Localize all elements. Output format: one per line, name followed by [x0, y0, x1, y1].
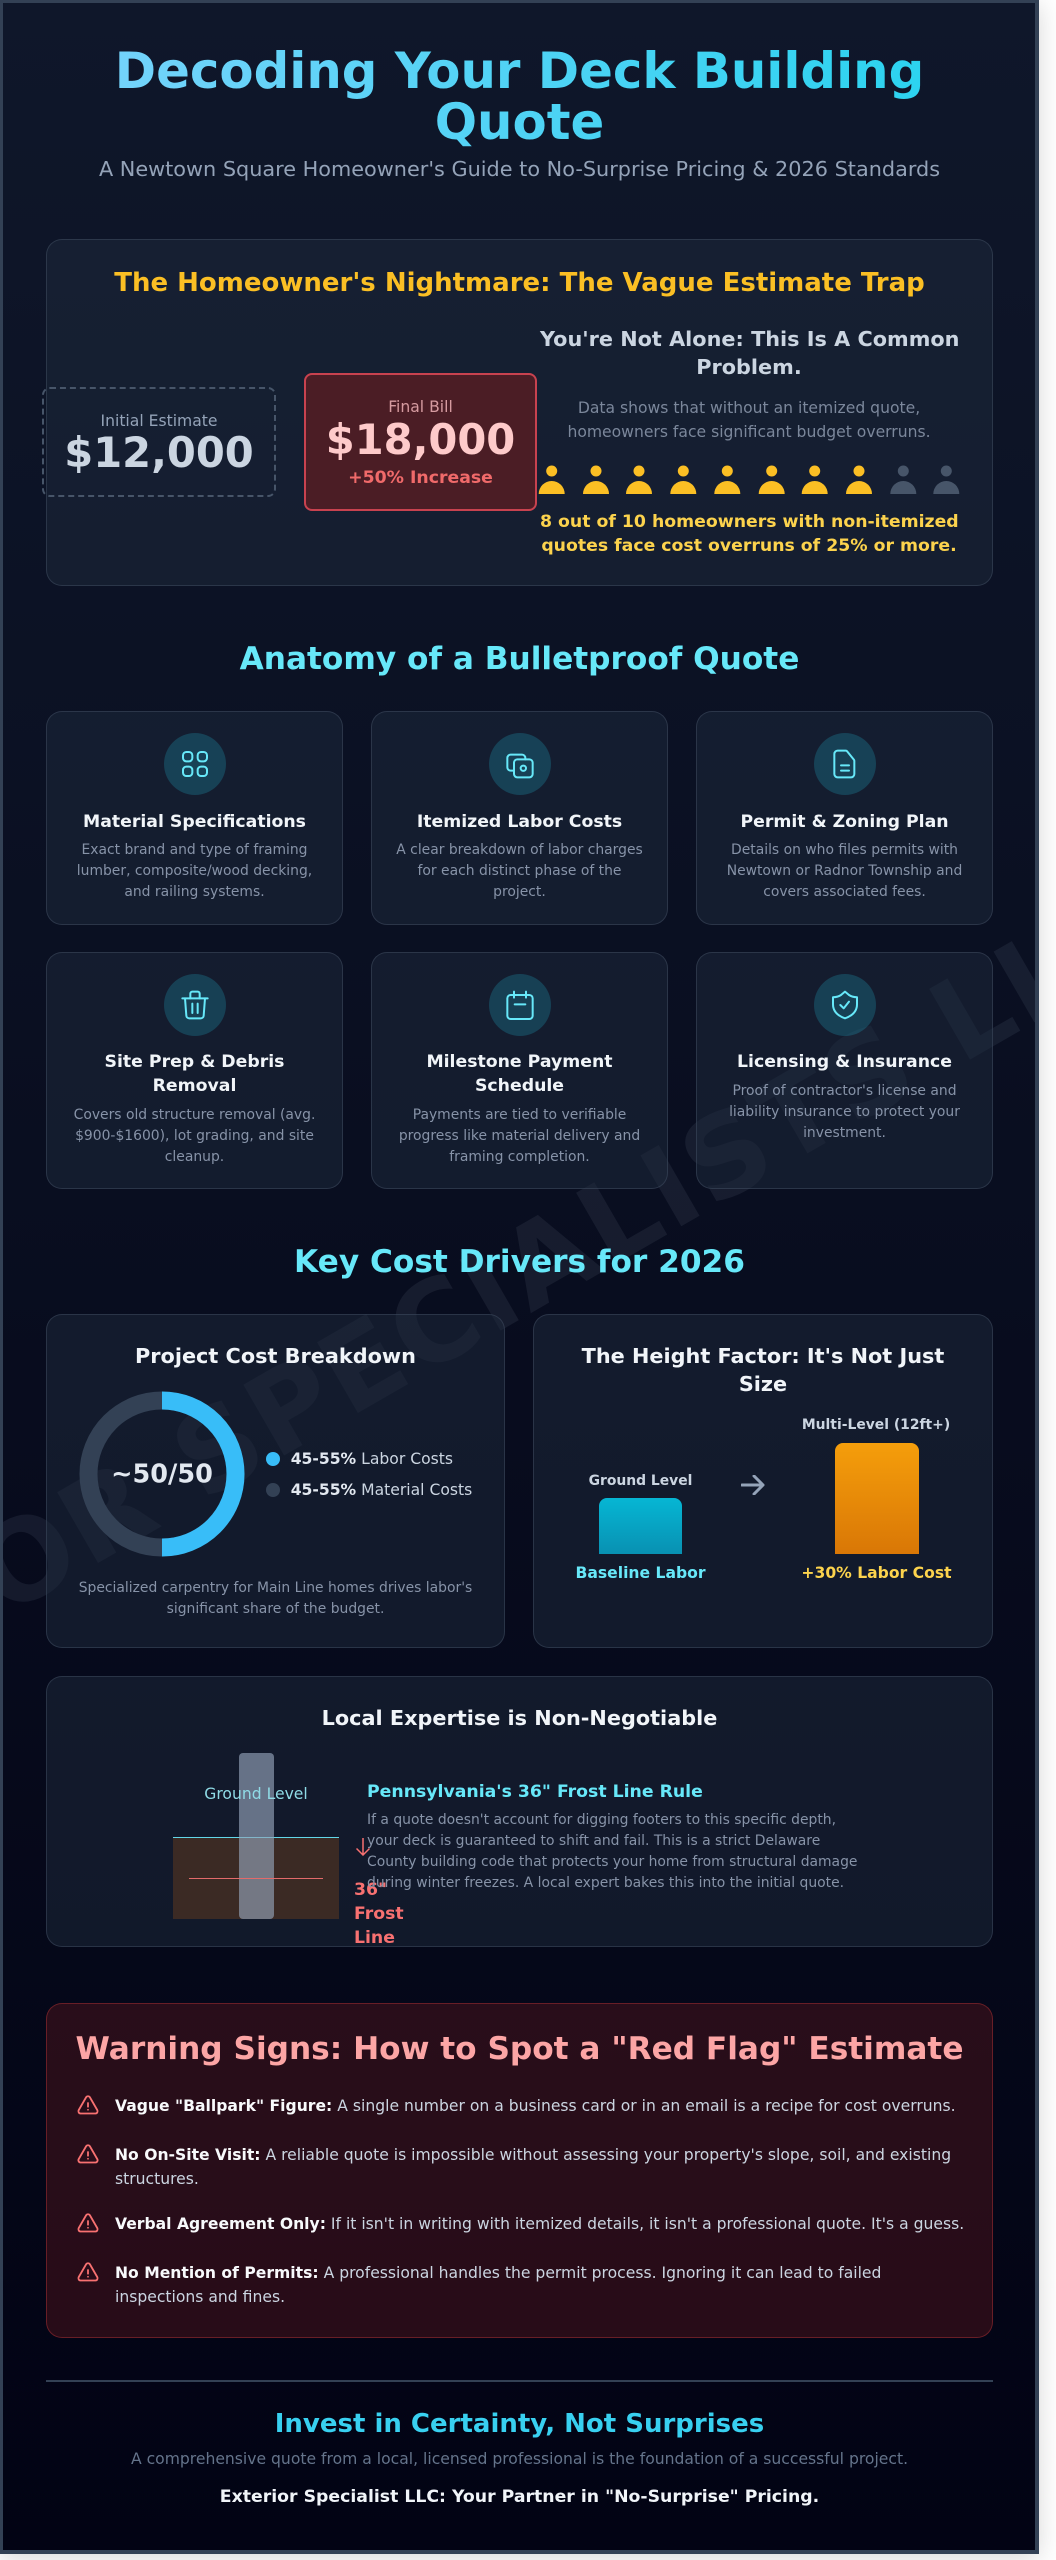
- frost line diagram: [173, 1753, 404, 1948]
- icon: warning 4: [78, 2262, 98, 2282]
- donut chart: ~50/50: [111, 1460, 213, 1490]
- card text: [729, 1082, 960, 1140]
- card title: Milestone Payment: [426, 1052, 613, 1072]
- card text: [727, 842, 962, 900]
- label: frost line: Line: [354, 1928, 395, 1948]
- icon: warning 2: [78, 2144, 98, 2164]
- panel: itemized labor costs: [371, 711, 668, 924]
- legend dot: labor: [266, 1452, 280, 1466]
- icon: squares: [164, 733, 226, 795]
- subtitle: A Newtown Square Homeowner's Guide to No-Surprise Pricing & 2026 Standards: [99, 157, 940, 181]
- post: [239, 1753, 274, 1919]
- card text: [77, 842, 312, 900]
- callout: initial estimate: [42, 387, 276, 497]
- warning item 3: Verbal Agreement Only: If it isn't in writing with itemized details, it isn't a professional quote. It's a guess.: [115, 2215, 964, 2233]
- label: baseline labor: Baseline Labor: [575, 1564, 706, 1582]
- icon: document: [814, 733, 876, 795]
- icon: trash: [164, 974, 226, 1036]
- frost rule text: If a quote doesn't account for digging footers to this specific depth,: [367, 1812, 836, 1828]
- text: 8 out of 10: [540, 512, 959, 556]
- card text: covers associated fees.: [763, 884, 926, 900]
- title: Decoding Your Deck Building: [115, 42, 924, 100]
- card text: Proof of contractor's license and: [732, 1082, 957, 1098]
- label: ground level: Ground Level: [204, 1785, 308, 1803]
- heading: nightmare: The Homeowner's Nightmare: The Vague Estimate Trap: [114, 268, 925, 298]
- panel title: Local Expertise is Non-Negotiable: [322, 1706, 717, 1730]
- arrow: down: [356, 1838, 370, 1856]
- label: ground level: Ground Level: [589, 1473, 692, 1489]
- panel: material specifications: [46, 711, 343, 924]
- panel: local expertise: [46, 1676, 993, 1947]
- icon row: 8 of 10 people: [538, 466, 960, 494]
- card text: investment.: [803, 1124, 886, 1140]
- panel: project cost breakdown: [46, 1314, 505, 1648]
- arrow: [741, 1475, 764, 1495]
- text: data shows: [567, 399, 931, 441]
- icon: calendar: [488, 974, 550, 1036]
- bar: ground level: [599, 1498, 682, 1554]
- heading: not alone: Problem.: [696, 355, 802, 379]
- card text: framing completion.: [449, 1149, 590, 1165]
- label: multi-level: Multi-Level (12ft+): [802, 1417, 950, 1433]
- callout: final bill: [304, 373, 537, 511]
- caption: significant share of the budget.: [167, 1600, 384, 1616]
- panel: the vague estimate trap: [46, 239, 993, 586]
- card text: [396, 842, 643, 900]
- icon: warning 3: [78, 2213, 98, 2232]
- frost line: [189, 1878, 323, 1879]
- title: [0, 46, 1039, 148]
- card text: [74, 1107, 315, 1165]
- label: frost line: 36": [354, 1880, 387, 1900]
- card title: Licensing & Insurance: [737, 1052, 952, 1072]
- panel: milestone payment schedule: [371, 952, 668, 1189]
- card title: Removal: [153, 1076, 236, 1096]
- panel: site prep and debris removal: [46, 952, 343, 1189]
- caption: Specialized carpentry for Main Line homes drives labor's: [79, 1580, 472, 1596]
- warning heading: Warning Signs: How to Spot a "Red Flag" Estimate: [76, 2031, 963, 2067]
- card text: cleanup.: [165, 1149, 224, 1165]
- card title: [105, 1052, 284, 1096]
- card text: [399, 1107, 640, 1165]
- label: frost line: Frost: [354, 1904, 404, 1924]
- warning item 4: [115, 2264, 881, 2306]
- caption: [79, 1580, 472, 1616]
- text: 8 out of 10: quotes face cost overruns of 25% or more.: [541, 536, 957, 556]
- label: frost line: [354, 1880, 404, 1948]
- footer heading: Invest in Certainty, Not Surprises: [275, 2409, 764, 2439]
- card text: liability insurance to protect your: [729, 1104, 960, 1120]
- frost rule text: County building code that protects your home from structural damage: [367, 1854, 857, 1870]
- heading: key cost drivers: Key Cost Drivers for 2026: [294, 1244, 745, 1280]
- soil: [173, 1837, 339, 1919]
- frost rule text: during winter freezes. A local expert bakes this into the initial quote.: [367, 1874, 844, 1890]
- legend text: labor: 45-55% Labor Costs: [291, 1450, 453, 1468]
- bar: multi-level: [835, 1443, 919, 1554]
- card text: Covers old structure removal (avg.: [74, 1107, 315, 1123]
- initial estimate value: $12,000: [64, 428, 254, 477]
- initial estimate label: Initial Estimate: [100, 412, 217, 430]
- panel: licensing and insurance: [696, 952, 993, 1189]
- label: labor cost: +30% Labor Cost: [801, 1564, 952, 1582]
- panel title: [582, 1344, 944, 1396]
- increase note: +50% Increase: [348, 468, 493, 488]
- legend dot: material: [266, 1483, 280, 1497]
- final bill label: Final Bill: [388, 398, 453, 416]
- panel: permit and zoning plan: [696, 711, 993, 924]
- final bill value: $18,000: [326, 415, 515, 464]
- panel title: Size: [739, 1372, 787, 1396]
- card title: Material Specifications: [83, 812, 306, 832]
- text: data shows: homeowners face significant budget overruns.: [567, 423, 931, 441]
- card text: progress like material delivery and: [399, 1128, 640, 1144]
- card text: Newtown or Radnor Township and: [727, 863, 962, 879]
- donut chart: [80, 1392, 244, 1556]
- text: data shows: Data shows that without an itemized quote,: [578, 399, 920, 417]
- card text: and railing systems.: [124, 884, 265, 900]
- card title: Permit & Zoning Plan: [740, 812, 949, 832]
- card text: Payments are tied to verifiable: [413, 1107, 626, 1123]
- card text: for each distinct phase of the: [418, 863, 621, 879]
- card text: A clear breakdown of labor charges: [396, 842, 643, 858]
- icon: shield: [814, 974, 876, 1036]
- card text: project.: [493, 884, 546, 900]
- panel: height factor: [533, 1314, 993, 1648]
- warning item 2: structures.: [115, 2170, 199, 2188]
- panel title: Project Cost Breakdown: [135, 1344, 416, 1368]
- card title: Itemized Labor Costs: [417, 812, 622, 832]
- card text: $900-$1600), lot grading, and site: [75, 1128, 314, 1144]
- card title: Site Prep & Debris: [105, 1052, 284, 1072]
- card text: lumber, composite/wood decking,: [77, 863, 312, 879]
- legend text: material: 45-55% Material Costs: [291, 1481, 472, 1499]
- card title: Schedule: [475, 1076, 564, 1096]
- legend: [266, 1450, 472, 1499]
- footer text: A comprehensive quote from a local, licensed professional is the foundation of a successful project.: [131, 2450, 908, 2468]
- icon: cash: [488, 733, 550, 795]
- frost rule title: Pennsylvania's 36" Frost Line Rule: [367, 1782, 703, 1802]
- panel: warning signs: [46, 2003, 993, 2338]
- frost rule text: your deck is guaranteed to shift and fail. This is a strict Delaware: [367, 1832, 820, 1848]
- warning item 1: Vague "Ballpark" Figure: A single number on a business card or in an email is a recipe for cost overruns.: [115, 2097, 956, 2115]
- icon: warning 1: [78, 2095, 98, 2114]
- warning item 4: inspections and fines.: [115, 2288, 285, 2306]
- footer company line: Exterior Specialist LLC: Your Partner in "No-Surprise" Pricing.: [220, 2487, 819, 2507]
- heading: not alone: [540, 327, 959, 379]
- warning item 4: No Mention of Permits: A professional handles the permit process. Ignoring it can lead to failed: [115, 2264, 881, 2282]
- frost rule text: [367, 1812, 857, 1890]
- card text: Exact brand and type of framing: [81, 842, 308, 858]
- heading: anatomy: Anatomy of a Bulletproof Quote: [240, 641, 799, 677]
- card text: Details on who files permits with: [731, 842, 958, 858]
- warning item 2: [115, 2146, 951, 2188]
- text: 8 out of 10: 8 out of 10 homeowners with non-itemized: [540, 512, 959, 532]
- footer: [46, 2380, 993, 2520]
- warning item 2: No On-Site Visit: A reliable quote is impossible without assessing your property's slope, soil, and existing: [115, 2146, 951, 2164]
- heading: not alone: You're Not Alone: This Is A Common: [540, 327, 959, 351]
- panel title: The Height Factor: It's Not Just: [582, 1344, 944, 1368]
- title: Quote: [435, 93, 604, 151]
- card title: [426, 1052, 613, 1096]
